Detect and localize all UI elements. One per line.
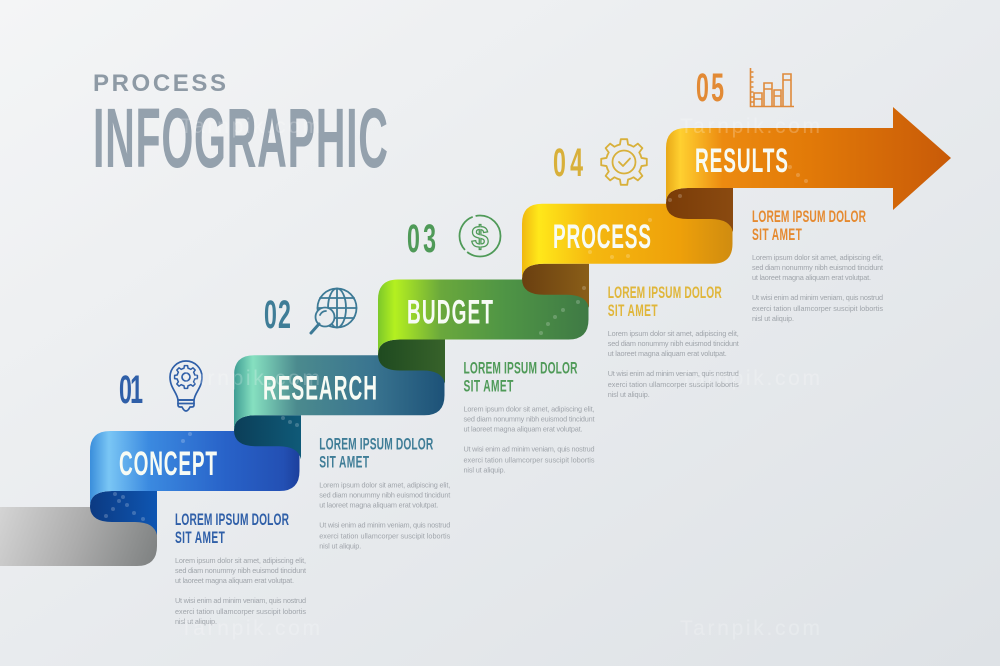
ribbon: budget: BUDGET — [407, 293, 493, 331]
text block: step 3: LOREM IPSUM DOLOR — [464, 358, 578, 377]
text block: step 4: sed diam nonummy nibh euismod tincidunt — [608, 339, 739, 348]
text block: step 1: exerci tation ullamcorper suscipit lobortis — [175, 607, 306, 616]
text block: step 4 — [608, 282, 739, 399]
text block: step 5: Lorem ipsum dolor sit amet, adipiscing elit, — [752, 253, 883, 262]
number 04: 04 — [553, 139, 583, 185]
text block: step 1: LOREM IPSUM DOLOR — [175, 509, 289, 529]
text block: step 3: ut laoreet magna aliquam erat volutpat. — [464, 424, 582, 434]
title — [93, 70, 388, 186]
ribbon: results arrow — [666, 107, 951, 232]
ribbon: results arrow: RESULTS — [695, 141, 788, 179]
ribbon: research — [234, 355, 444, 459]
text block: step 3: Ut wisi enim ad minim veniam, quis nostrud — [464, 444, 594, 454]
watermarks: Tarnpik.com — [680, 617, 820, 640]
watermarks: Tarnpik.com — [680, 115, 820, 138]
number 01: 01 — [119, 366, 143, 412]
text block: step 5: nisl ut aliquip. — [752, 314, 794, 323]
text block: step 4: SIT AMET — [608, 300, 658, 319]
text block: step 3: exerci tation ullamcorper suscipit lobortis — [464, 456, 595, 464]
ribbon: concept — [90, 431, 300, 535]
watermarks: Tarnpik.com — [680, 367, 820, 390]
text block: step 2: LOREM IPSUM DOLOR — [319, 433, 433, 453]
text block: step 1: ut laoreet magna aliquam erat volutpat. — [175, 576, 294, 585]
text block: step 5: SIT AMET — [752, 224, 802, 244]
ribbon: process — [522, 204, 732, 308]
text block: step 3: SIT AMET — [464, 376, 514, 395]
text block: step 1: Lorem ipsum dolor sit amet, adipiscing elit, — [175, 556, 306, 565]
text block: step 4: exerci tation ullamcorper suscipit lobortis — [608, 380, 739, 389]
text block: step 5: ut laoreet magna aliquam erat volutpat. — [752, 273, 871, 282]
text block: step 2: exerci tation ullamcorper suscipit lobortis — [319, 531, 451, 540]
text block: step 5: sed diam nonummy nibh euismod tincidunt — [752, 263, 883, 272]
text block: step 4: LOREM IPSUM DOLOR — [608, 282, 722, 301]
watermarks — [180, 115, 820, 640]
number 02: 02 — [264, 291, 291, 337]
ribbon: concept: CONCEPT — [119, 444, 217, 482]
icon: light bulb with gear — [170, 361, 202, 411]
text block: step 4: ut laoreet magna aliquam erat volutpat. — [608, 349, 727, 358]
text block: step 2 — [319, 433, 451, 550]
number 03: 03 — [407, 215, 436, 261]
text block: step 4: Ut wisi enim ad minim veniam, quis nostrud — [608, 369, 739, 378]
text block: step 3 — [464, 358, 595, 474]
title line: process: PROCESS — [93, 70, 226, 97]
text block: step 2: nisl ut aliquip. — [319, 541, 361, 550]
text block: step 4: Lorem ipsum dolor sit amet, adipiscing elit, — [608, 329, 739, 338]
ribbon: budget — [378, 280, 588, 384]
icon: globe with magnifier — [311, 288, 356, 333]
text block: step 1 — [175, 509, 306, 626]
icon: dollar coin — [460, 216, 500, 256]
icon: dollar coin: $ — [471, 219, 489, 254]
text block: step 5: LOREM IPSUM DOLOR — [752, 206, 866, 226]
title line: infographic: INFOGRAPHIC — [93, 92, 388, 186]
watermarks: Tarnpik.com — [180, 617, 320, 640]
text block: step 5: Ut wisi enim ad minim veniam, quis nostrud — [752, 293, 883, 302]
text block: step 3: nisl ut aliquip. — [464, 466, 506, 474]
ribbon: research: RESEARCH — [263, 369, 377, 407]
text block: step 2: Lorem ipsum dolor sit amet, adipiscing elit, — [319, 480, 450, 489]
watermarks: Tarnpik.com — [180, 367, 320, 390]
text block: step 1: sed diam nonummy nibh euismod tincidunt — [175, 566, 306, 575]
text block: step 2: SIT AMET — [319, 451, 369, 471]
text block: step 1: Ut wisi enim ad minim veniam, quis nostrud — [175, 596, 306, 605]
text block: step 5: exerci tation ullamcorper suscipit lobortis — [752, 304, 883, 313]
icon: gear with check — [601, 139, 647, 185]
text block: step 1: nisl ut aliquip. — [175, 617, 217, 626]
icon: bar chart — [750, 68, 794, 106]
watermarks: Tarnpik.com — [180, 115, 320, 138]
text block: step 3: sed diam nonummy nibh euismod tincidunt — [464, 414, 594, 424]
text block: step 2: sed diam nonummy nibh euismod tincidunt — [319, 490, 450, 499]
text block: step 1: SIT AMET — [175, 527, 225, 547]
ribbon: process: PROCESS — [553, 217, 651, 255]
text block: step 5 — [752, 206, 883, 323]
text block: step 2: Ut wisi enim ad minim veniam, quis nostrud — [319, 520, 450, 529]
text block: step 3: Lorem ipsum dolor sit amet, adipiscing elit, — [464, 404, 594, 414]
text block: step 4: nisl ut aliquip. — [608, 390, 650, 399]
text block: step 2: ut laoreet magna aliquam erat volutpat. — [319, 500, 438, 509]
number 05: 05 — [696, 64, 724, 110]
ribbon: grey start — [0, 507, 157, 566]
